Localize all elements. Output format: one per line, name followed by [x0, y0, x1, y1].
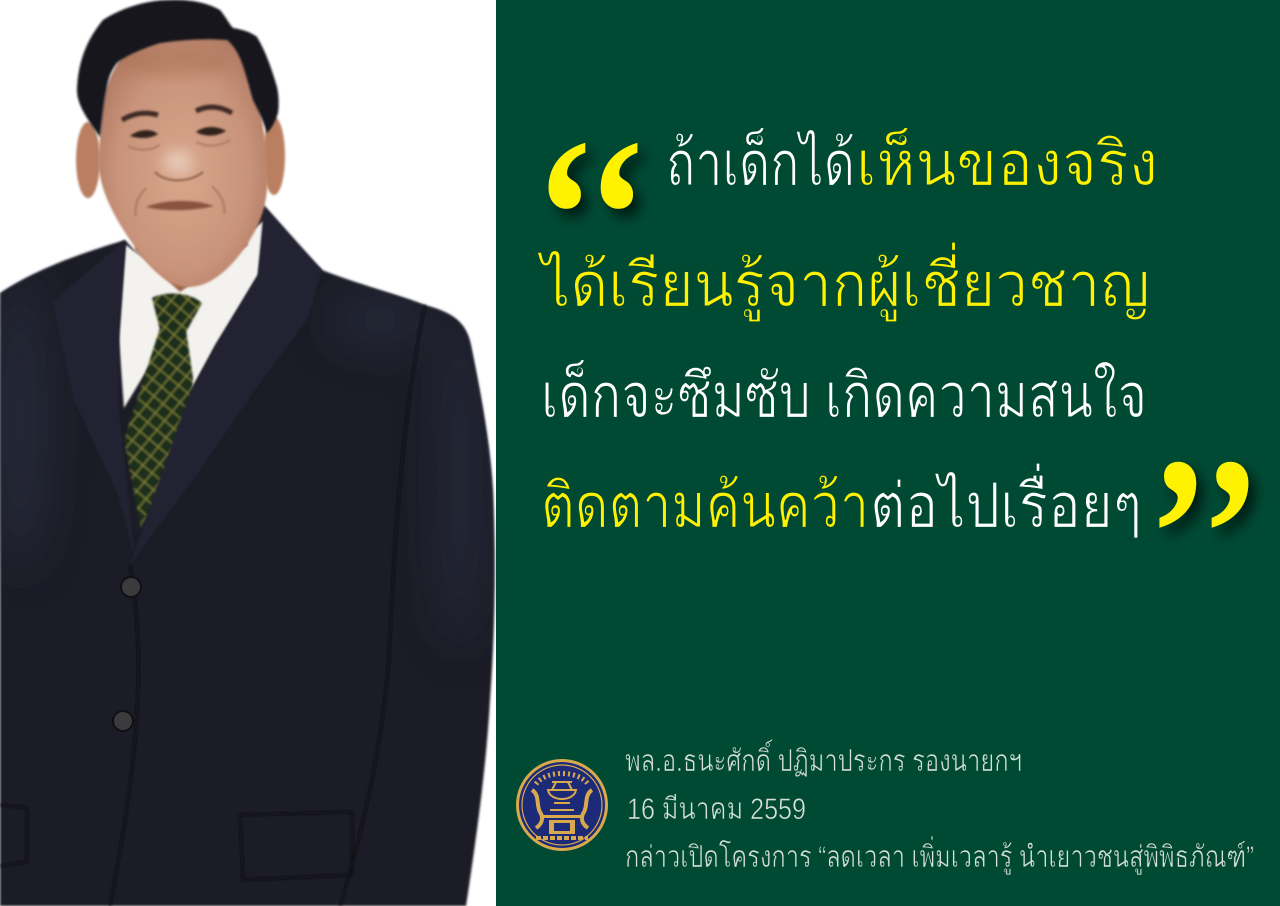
quote: opening mark: ‘‘ — [534, 94, 648, 336]
quote line 1 — [666, 127, 1158, 199]
icon: government seal — [516, 759, 608, 851]
attribution: speaker name: พล.อ.ธนะศักดิ์ ปฏิมาประกร รองนายกฯ — [625, 739, 1022, 778]
quote line 2: ได้เรียนรู้จากผู้เชี่ยวชาญ — [536, 242, 1150, 322]
right green panel — [496, 0, 1280, 906]
under-eye and smile lines — [128, 140, 230, 216]
hair — [77, 0, 279, 137]
quote line 4 — [541, 463, 1142, 541]
suit jacket — [0, 205, 495, 906]
left lapel — [52, 240, 135, 560]
portrait of speaker — [0, 0, 495, 906]
quote line 1: เห็นของจริง — [856, 127, 1158, 199]
crown rays — [536, 774, 588, 784]
quote line 1: ถ้าเด็กได้ — [666, 127, 855, 199]
facial features — [122, 107, 232, 216]
quote line 3: เด็กจะซึมซับ เกิดความสนใจ — [541, 359, 1147, 431]
shirt — [119, 220, 265, 408]
suit highlights — [0, 270, 480, 650]
mouth — [146, 201, 214, 210]
ears — [76, 117, 285, 198]
attribution: date: 16 มีนาคม 2559 — [627, 793, 806, 826]
left white panel — [0, 0, 496, 906]
quote: closing mark: ’’ — [1148, 413, 1262, 655]
right lapel — [130, 205, 322, 565]
eyes — [130, 127, 226, 138]
jacket seams — [0, 305, 425, 906]
central bowl — [548, 782, 576, 810]
forehead shading — [120, 48, 230, 76]
pedestal — [541, 815, 583, 818]
face — [98, 31, 268, 287]
quote line 4: ต่อไปเรื่อยๆ — [870, 463, 1142, 541]
guardian lions — [532, 790, 542, 828]
tie — [124, 294, 202, 528]
neck shadow — [135, 215, 248, 292]
quote line 4: ติดตามค้นคว้า — [541, 472, 869, 541]
buttons — [113, 577, 141, 731]
brows — [122, 107, 232, 120]
base band — [536, 836, 588, 840]
nose — [163, 150, 193, 174]
